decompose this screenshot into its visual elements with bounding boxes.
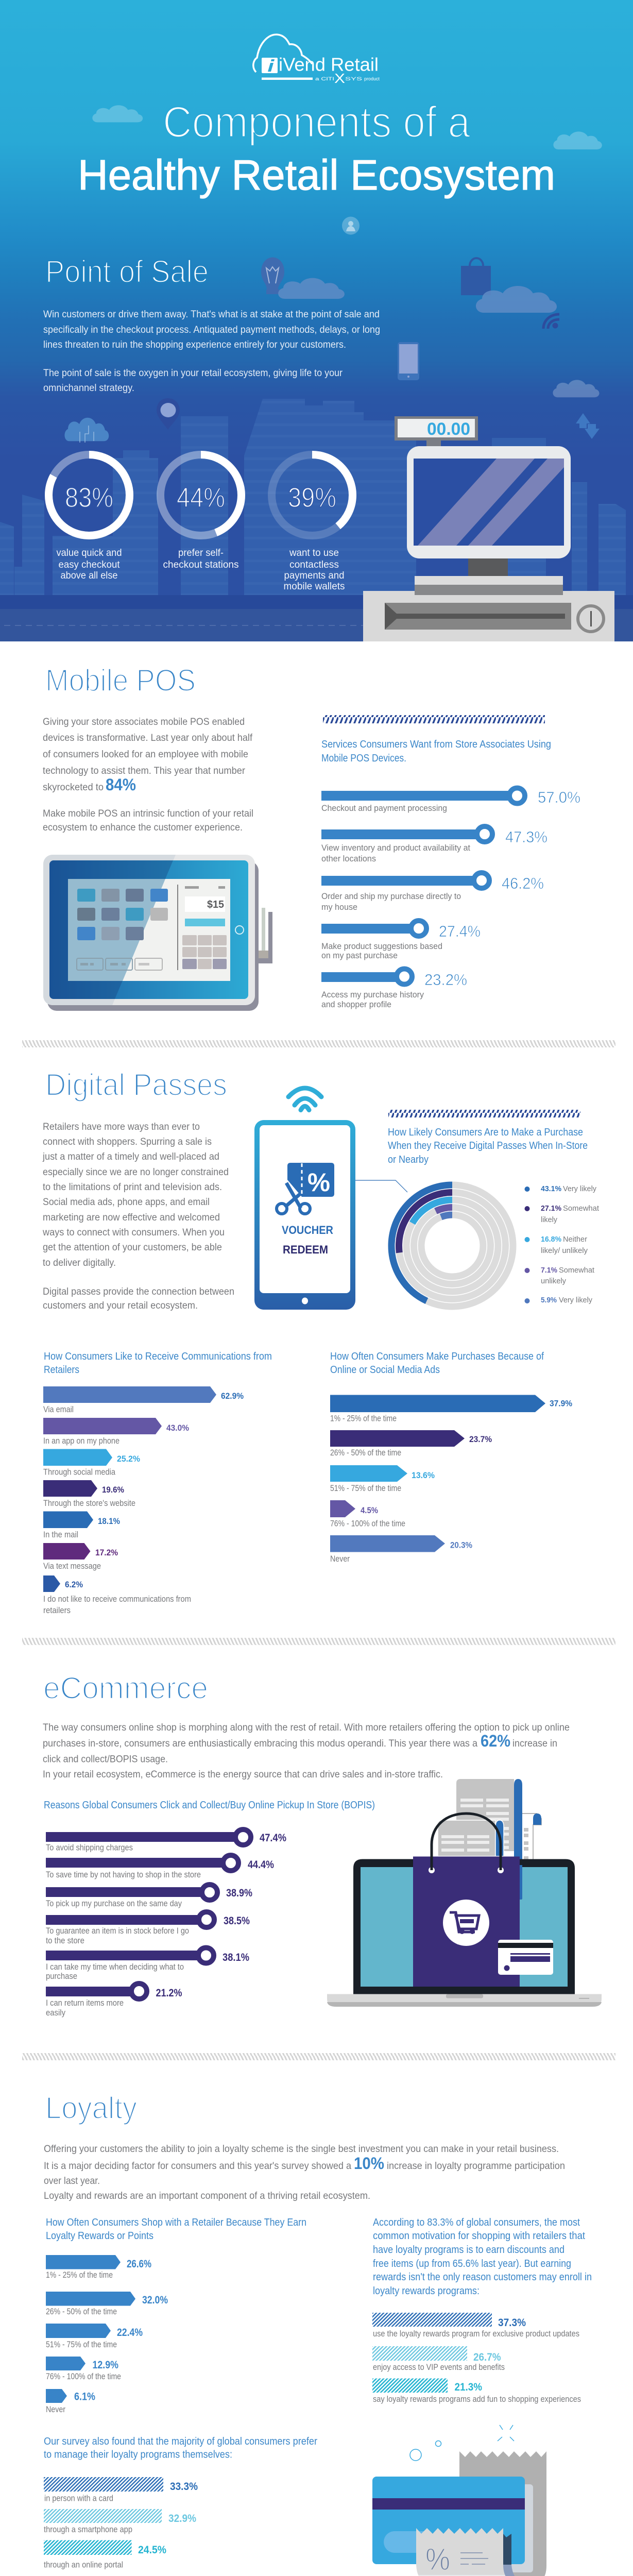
panel: social media ads chart: 51% - 75% of the time [330, 1484, 401, 1493]
donut: 39%: mobile wallets [283, 581, 345, 592]
radial chart [391, 1185, 513, 1307]
bar: save time [46, 1855, 274, 1879]
panel: services chart [321, 715, 580, 1009]
logo: iVend Retail white: product [364, 76, 380, 81]
text block: point of sale intro: specifically in the checkout process. Antiquated payment methods, delays, or long [43, 325, 380, 335]
icon: voucher ticket [287, 1163, 334, 1197]
panel: social media ads chart: 26% - 50% of the time [330, 1448, 401, 1458]
legend: likely/ unlikely [541, 1246, 588, 1255]
illustration: phone with voucher: REDEEM [283, 1243, 328, 1256]
text block: loyalty intro: over last year. [44, 2176, 100, 2187]
app tiles [77, 889, 168, 970]
illustration: cash register: 00.00 [427, 419, 470, 439]
donut: 83%: value quick and [57, 548, 122, 558]
panel: loyalty rewards frequency chart: 6.1% [74, 2391, 95, 2403]
bar: purchase history: Access my purchase history [321, 990, 424, 999]
panel: communications chart: 43.0% [166, 1423, 189, 1433]
panel: communications chart: 17.2% [95, 1548, 118, 1557]
logo: iVend Retail white: SYS [345, 76, 362, 81]
text block: digital passes intro: just a matter of a timely and well-placed ad [42, 1151, 219, 1162]
bar: shipping charges: To avoid shipping charges [46, 1843, 133, 1853]
panel: communications chart: How Consumers Like to Receive Communications from [44, 1351, 272, 1362]
panel: loyalty motivation text and bars: use the loyalty rewards program for exclusive product updates [373, 2329, 579, 2338]
icon: scissors [277, 1183, 310, 1214]
panel: loyalty programme management chart: 24.5% [138, 2544, 166, 2556]
panel: social media ads chart: 4.5% [361, 1505, 378, 1515]
legend: unlikely [541, 1277, 566, 1285]
bar: shipping charges [46, 1829, 286, 1853]
text block: mobile pos intro: 84% [106, 775, 136, 794]
bar: in stock: to the store [46, 1936, 84, 1945]
bar: return items: 21.2% [156, 1987, 182, 1999]
text block: mobile pos intro: of consumers looked for an employee with mobile [43, 749, 248, 760]
legend: Very likely [563, 1184, 596, 1193]
panel: loyalty rewards frequency chart: Never [46, 2405, 65, 2414]
bar: order and ship [321, 873, 544, 912]
bar: order and ship: 46.2% [502, 874, 544, 892]
credit card [498, 1940, 553, 1975]
bar: in stock: 38.5% [224, 1915, 250, 1927]
panel: loyalty motivation text and bars: 26.7% [473, 2351, 501, 2363]
donut: 39%: want to use [289, 548, 339, 558]
text block: ecommerce intro: increase in [512, 1738, 557, 1749]
text block: point of sale intro: The point of sale is the oxygen in your retail ecosystem, giving life to your [43, 368, 343, 379]
panel: loyalty motivation text and bars: say loyalty rewards programs add fun to shopping experiences [373, 2395, 581, 2404]
panel: communications chart: Via text message [43, 1562, 101, 1571]
panel: bopis chart [44, 1800, 375, 2018]
text block: point of sale intro: omnichannel strategy. [43, 383, 134, 394]
bar: take my time [46, 1947, 249, 1981]
illustration: tablet pos: $15 [207, 899, 224, 910]
panel: loyalty programme management chart: to manage their loyalty programs themselves: [44, 2449, 232, 2461]
donut: 39% [272, 454, 352, 592]
legend: 7.1% [541, 1266, 557, 1275]
bar: product suggestions: 27.4% [439, 922, 481, 940]
panel: communications chart: I do not like to receive communications from [43, 1595, 191, 1604]
laptop [327, 1859, 602, 2007]
heading: ecommerce: eCommerce [43, 1671, 208, 1705]
panel: communications chart: 25.2% [117, 1454, 140, 1464]
panel: loyalty rewards frequency chart: 51% - 75% of the time [46, 2340, 117, 2349]
panel: social media ads chart: 20.3% [450, 1540, 472, 1550]
bar: product suggestions: Make product suggestions based [321, 942, 442, 951]
text block: digital passes intro: especially since we are no longer constrained [43, 1167, 229, 1178]
text block: digital passes intro: connect with shoppers. Spurring a sale is [43, 1137, 212, 1147]
legend: 27.1% [541, 1204, 561, 1213]
text block: ecommerce intro: purchases in-store, consumers are enthusiastically embracing this modus operandi. This year there was a [43, 1738, 477, 1749]
legend: likely [541, 1215, 557, 1224]
illustration: laptop with shopping bag and receipts [327, 1779, 602, 2007]
illustration: phone with voucher [254, 1120, 355, 1310]
text block: digital passes intro: Retailers have more ways than ever to [43, 1122, 200, 1132]
panel: purchase likelihood chart: When they Receive Digital Passes When In-Store [388, 1140, 588, 1151]
text block: point of sale intro: lines threaten to ruin the shopping experience entirely for your customers. [43, 340, 346, 350]
panel: loyalty rewards frequency chart: 26% - 50% of the time [46, 2307, 117, 2316]
panel: loyalty programme management chart: 33.3% [170, 2481, 198, 2493]
text block: ecommerce intro: The way consumers online shop is morphing along with the rest of retail. With more retailers offering the option to pick up online [43, 1722, 570, 1733]
text block: digital passes intro: Social media ads, phone apps, and email [43, 1197, 210, 1208]
text block: loyalty intro: Offering your customers the ability to join a loyalty scheme is the single best investment you can make in your retail business. [44, 2144, 559, 2155]
icon: shopping bag [461, 258, 491, 295]
icon: wifi [288, 1088, 321, 1110]
donut: 39%: contactless [289, 560, 339, 570]
panel: communications chart: Retailers [44, 1364, 79, 1376]
bar: return items: easily [46, 2008, 66, 2018]
donut: 39%: 39% [288, 482, 336, 513]
illustration: loyalty card and receipt [372, 2425, 546, 2576]
panel: loyalty motivation text and bars: loyalty rewards programs: [373, 2285, 480, 2297]
panel: loyalty programme management chart: through an online portal [44, 2561, 123, 2570]
text block: point of sale intro: Win customers or drive them away. That's what is at stake at the point of sale and [43, 309, 380, 320]
logo: iVend Retail white: iVend Retail [279, 54, 379, 75]
text block: digital passes intro: to deliver digitally. [43, 1258, 116, 1268]
panel: communications chart: Via email [43, 1405, 74, 1414]
text block: point of sale intro [43, 309, 380, 394]
text block: mobile pos intro: technology to assist them. This year that number [43, 766, 246, 776]
panel: loyalty motivation text and bars: According to 83.3% of global consumers, the most [373, 2217, 580, 2228]
shopping bag [413, 1814, 520, 1987]
bar: inventory: View inventory and product availability at [321, 843, 470, 853]
panel: communications chart: In an app on my phone [43, 1436, 119, 1446]
donut: 44%: checkout stations [163, 560, 239, 570]
text block: ecommerce intro: click and collect/BOPIS usage. [43, 1754, 168, 1765]
panel: social media ads chart: Online or Social Media Ads [330, 1364, 440, 1376]
panel: social media ads chart: How Often Consumers Make Purchases Because of [330, 1351, 544, 1362]
heading: digital passes: Digital Passes [45, 1067, 227, 1102]
text block: mobile pos intro [43, 717, 253, 833]
bar: in stock: To guarantee an item is in stock before I go [46, 1926, 189, 1936]
icon: cart [450, 1912, 479, 1934]
panel: loyalty motivation text and bars: enjoy access to VIP events and benefits [373, 2363, 505, 2372]
panel: loyalty rewards frequency chart: Loyalty Rewards or Points [46, 2230, 153, 2242]
panel: loyalty motivation text and bars: 37.3% [498, 2317, 526, 2329]
heading: mobile pos: Mobile POS [45, 663, 196, 698]
text block: mobile pos intro: Giving your store associates mobile POS enabled [43, 717, 245, 727]
bar: inventory: 47.3% [505, 828, 548, 846]
icon: floating clouds [92, 105, 602, 397]
title: Healthy Retail Ecosystem [78, 151, 555, 199]
legend: Very likely [559, 1296, 592, 1304]
text block: digital passes intro: customers and your retail ecosystem. [43, 1300, 198, 1311]
icon: up and down arrows [576, 413, 600, 439]
panel: purchase likelihood chart: or Nearby [388, 1154, 429, 1165]
text block: loyalty intro [44, 2144, 565, 2201]
bar: return items [46, 1984, 182, 2018]
keypad [182, 935, 227, 969]
legend: Somewhat [559, 1266, 595, 1275]
illustration: loyalty card and receipt: % [425, 2542, 450, 2576]
text block: digital passes intro: marketing are now effective and welcomed [43, 1212, 220, 1223]
panel: loyalty motivation text and bars [372, 2217, 592, 2404]
icon: voucher ticket: % [307, 1168, 330, 1197]
panel: communications chart: 19.6% [102, 1485, 124, 1495]
text block: digital passes intro [42, 1122, 234, 1311]
panel: services chart: Services Consumers Want from Store Associates Using [321, 739, 551, 750]
illustration: tablet pos [43, 855, 272, 1011]
bar: take my time: purchase [46, 1972, 77, 1981]
panel: social media ads chart: 37.9% [550, 1398, 572, 1409]
text block: loyalty intro: It is a major deciding factor for consumers and this year's survey showed a [44, 2161, 351, 2172]
panel: loyalty motivation text and bars: common motivation for shopping with retailers that [373, 2230, 585, 2242]
title [78, 98, 555, 199]
bar: save time: To save time by not having to shop in the store [46, 1870, 201, 1879]
panel: loyalty rewards frequency chart [46, 2217, 306, 2414]
icon: map pin [157, 398, 180, 430]
panel: loyalty motivation text and bars: rewards isn't the only reason customers may enroll in [373, 2272, 592, 2283]
bar: in stock [46, 1912, 250, 1945]
bar: order and ship: Order and ship my purchase directly to [321, 892, 461, 901]
panel: purchase likelihood chart [388, 1110, 600, 1307]
text block: digital passes intro: get the attention of your customers, be able [43, 1242, 222, 1253]
bar: shipping charges: 47.4% [260, 1832, 286, 1844]
text block: mobile pos intro: ecosystem to enhance the customer experience. [43, 822, 243, 833]
legend [524, 1184, 600, 1304]
panel: communications chart: Through the store's website [43, 1499, 135, 1508]
panel: communications chart [43, 1351, 272, 1615]
bar: same day: 38.9% [226, 1887, 252, 1899]
legend: 43.1% [541, 1184, 561, 1193]
text block: ecommerce intro: In your retail ecosystem, eCommerce is the energy source that can drive sales and in-store traffic. [43, 1769, 443, 1780]
text block: loyalty intro: 10% [354, 2154, 384, 2173]
bar: checkout: Checkout and payment processing [321, 804, 447, 813]
panel: loyalty programme management chart: 32.9% [168, 2513, 196, 2524]
panel: loyalty programme management chart: through a smartphone app [44, 2525, 132, 2534]
panel: loyalty programme management chart: in person with a card [44, 2494, 113, 2503]
donut: 44%: 44% [177, 482, 225, 513]
text block: mobile pos intro: devices is transformative. Last year only about half [43, 733, 253, 743]
illustration: city skyline [0, 399, 626, 595]
panel: communications chart: retailers [43, 1606, 71, 1615]
panel: loyalty rewards frequency chart: 12.9% [93, 2359, 118, 2371]
text block: digital passes intro: ways to connect with consumers. When you [42, 1227, 225, 1238]
bar: inventory [321, 826, 548, 863]
donut: 39%: payments and [284, 570, 344, 581]
panel: loyalty rewards frequency chart: 1% - 25% of the time [46, 2270, 113, 2280]
panel: loyalty rewards frequency chart: 32.0% [142, 2294, 168, 2306]
panel: communications chart: 18.1% [98, 1516, 120, 1526]
panel: loyalty motivation text and bars: 21.3% [454, 2381, 482, 2393]
donut: 83%: 83% [65, 482, 113, 513]
title: Components of a [163, 98, 471, 147]
donut: 83%: above all else [61, 570, 117, 581]
text block: mobile pos intro: Make mobile POS an intrinsic function of your retail [43, 808, 253, 819]
illustration: phone with voucher: VOUCHER [282, 1224, 333, 1236]
panel: social media ads chart [330, 1351, 572, 1564]
text block: loyalty intro: Loyalty and rewards are an important component of a thriving retail ecosystem. [44, 2191, 370, 2201]
icon: cloud over bag [476, 286, 557, 313]
legend: Somewhat [563, 1204, 600, 1213]
text block: digital passes intro: Digital passes provide the connection between [43, 1286, 234, 1297]
donut: 44%: prefer self- [178, 548, 224, 558]
bar: product suggestions [321, 921, 481, 960]
panel: social media ads chart: 23.7% [469, 1434, 492, 1444]
legend: Neither [563, 1235, 587, 1244]
bar: return items: I can return items more [46, 1998, 124, 2008]
donut: 83% [48, 454, 130, 581]
panel: loyalty rewards frequency chart: How Often Consumers Shop with a Retailer Because They Earn [46, 2217, 306, 2228]
heading: point of sale: Point of Sale [45, 254, 209, 289]
icon: wifi signal [543, 314, 559, 329]
panel: social media ads chart: 1% - 25% of the time [330, 1414, 397, 1423]
receipts [438, 1779, 541, 1900]
bar: purchase history: 23.2% [424, 971, 467, 989]
panel: bopis chart: Reasons Global Consumers Click and Collect/Buy Online Pickup In Store (BOPIS) [44, 1800, 375, 1811]
panel: communications chart: 62.9% [221, 1391, 244, 1401]
bar: checkout [321, 788, 580, 813]
logo: iVend Retail white [253, 35, 380, 86]
panel: loyalty motivation text and bars: have loyalty programs is to earn discounts and [373, 2244, 564, 2256]
icon: cloud with circuit [64, 418, 109, 443]
text block: ecommerce intro: 62% [481, 1732, 510, 1750]
panel: loyalty motivation text and bars: free items (up from 65.6% last year). But earning [373, 2258, 571, 2269]
logo: iVend Retail white: X [334, 71, 345, 86]
donut: 44% [161, 454, 241, 570]
panel: communications chart: 6.2% [65, 1580, 83, 1589]
icon: phone [398, 342, 419, 380]
bar: take my time: 38.1% [223, 1952, 249, 1963]
bar: inventory: other locations [321, 854, 376, 863]
panel: loyalty rewards frequency chart: 26.6% [127, 2258, 151, 2270]
text block: mobile pos intro: skyrocketed to [43, 782, 104, 793]
illustration: cash register [363, 416, 614, 641]
panel: services chart: Mobile POS Devices. [321, 753, 406, 764]
panel: header and point of sale hero [0, 0, 633, 641]
bar: same day [46, 1885, 252, 1908]
icon: person [342, 216, 360, 235]
bar: order and ship: my house [321, 903, 357, 912]
icon: light bulb [261, 258, 284, 294]
panel: loyalty programme management chart: Our survey also found that the majority of global consumers prefer [44, 2436, 317, 2447]
text block: digital passes intro: to the limitations of print and television ads. [43, 1182, 222, 1193]
legend: 16.8% [541, 1235, 561, 1244]
bar: purchase history: and shopper profile [321, 1000, 391, 1009]
panel: purchase likelihood chart: How Likely Consumers Are to Make a Purchase [388, 1127, 583, 1138]
panel: social media ads chart: 76% - 100% of the time [330, 1519, 405, 1528]
bar: purchase history [321, 969, 467, 1009]
panel: loyalty rewards frequency chart: 76% - 100% of the time [46, 2372, 121, 2381]
illustration: street [0, 595, 633, 641]
icon: cloud over bulb [278, 278, 345, 299]
panel: communications chart: Through social media [43, 1467, 116, 1477]
panel: loyalty programme management chart [44, 2436, 317, 2570]
panel: loyalty rewards frequency chart: 22.4% [117, 2327, 143, 2338]
logo: iVend Retail white: a CITI [315, 76, 334, 81]
bar: save time: 44.4% [248, 1859, 274, 1871]
text block: loyalty intro: increase in loyalty programme participation [387, 2161, 565, 2172]
bar: same day: To pick up my purchase on the same day [46, 1899, 182, 1908]
panel: communications chart: In the mail [43, 1530, 78, 1539]
bar: checkout: 57.0% [538, 788, 580, 806]
bar: take my time: I can take my time when deciding what to [46, 1962, 184, 1972]
panel: social media ads chart: 13.6% [412, 1470, 435, 1480]
donut: 83%: easy checkout [59, 560, 120, 570]
bar: product suggestions: on my past purchase [321, 951, 398, 960]
panel: social media ads chart: Never [330, 1554, 350, 1564]
heading: loyalty: Loyalty [45, 2091, 137, 2125]
legend: 5.9% [541, 1296, 557, 1304]
text block: ecommerce intro [43, 1722, 570, 1780]
